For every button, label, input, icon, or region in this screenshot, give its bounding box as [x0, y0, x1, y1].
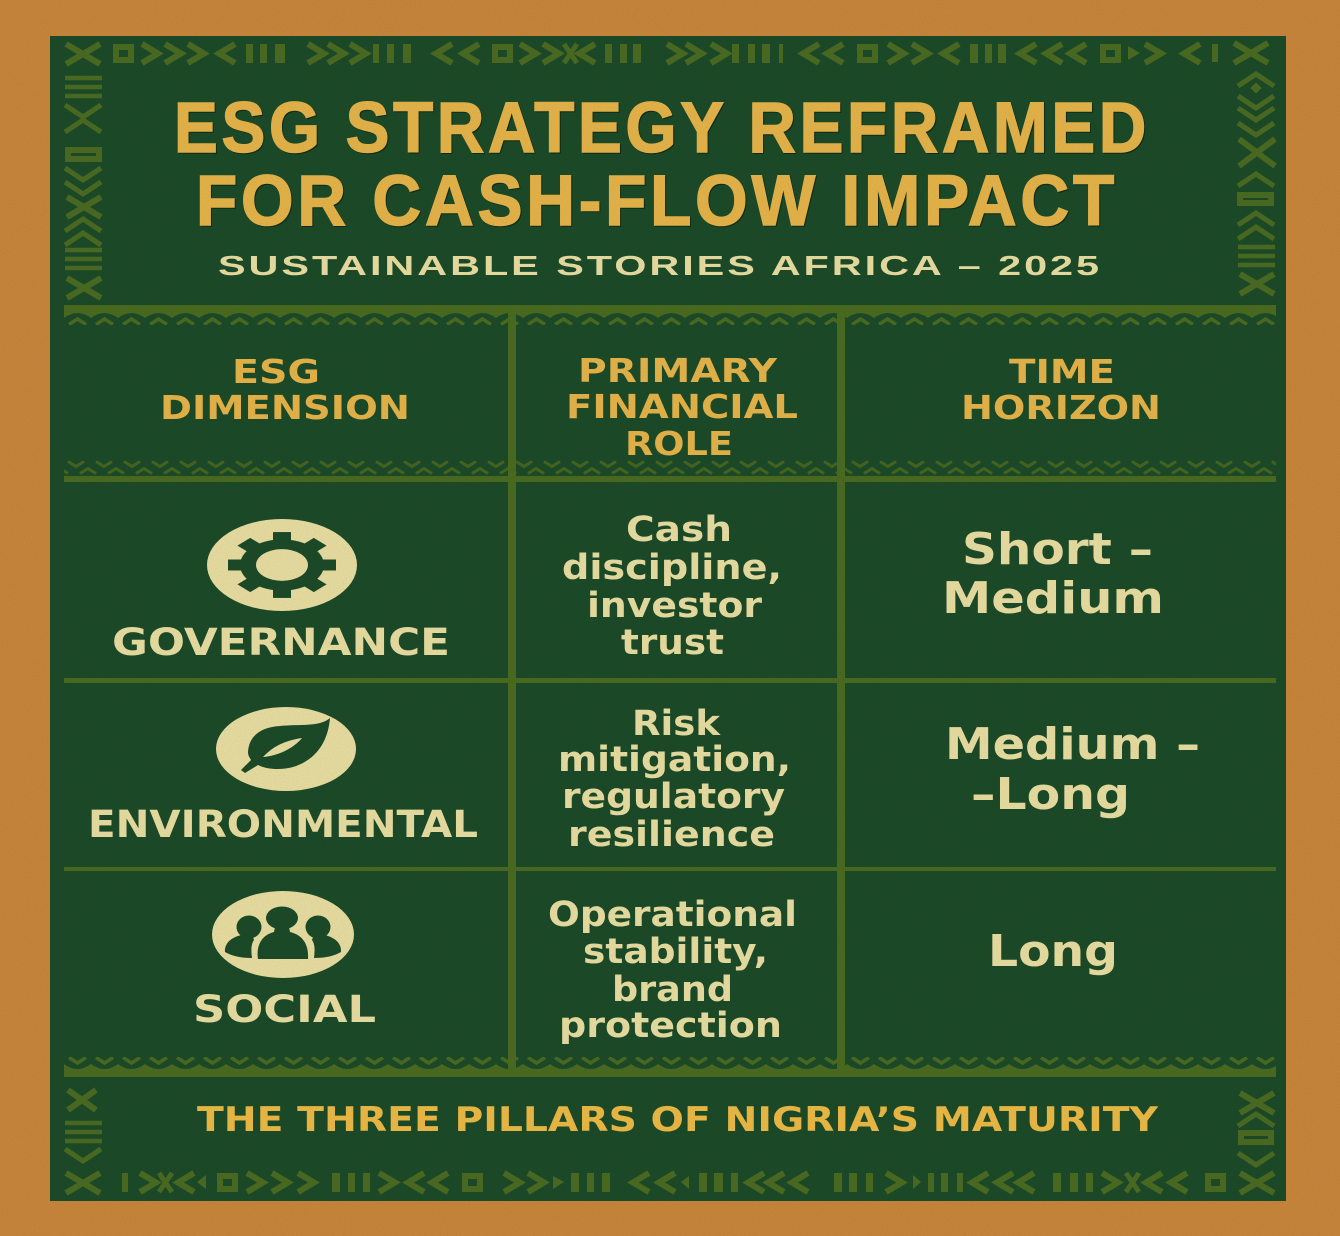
border: bottom pattern row: [66, 1173, 1274, 1193]
icon: gear: [207, 519, 357, 611]
column header: primary financial role: ROLE: [625, 424, 733, 463]
financial role: governance: [562, 510, 782, 663]
financial role: environmental: regulatory: [562, 777, 785, 817]
financial role: environmental: resilience: [568, 815, 775, 855]
row: social: [193, 891, 1118, 1046]
financial role: social: Operational: [548, 895, 797, 935]
time horizon: short to medium: [942, 524, 1164, 624]
title: FOR CASH-FLOW IMPACT: [196, 162, 1118, 241]
column header: ESG dimension: DIMENSION: [160, 388, 410, 427]
financial role: governance: Cash: [626, 510, 732, 550]
title: ESG STRATEGY REFRAMED: [174, 89, 1150, 168]
row: governance: [112, 510, 1164, 664]
financial role: governance: investor: [587, 586, 763, 626]
time horizon: short to medium: Short –: [962, 524, 1153, 575]
table grid: [64, 305, 1276, 1077]
subtitle: SUSTAINABLE STORIES AFRICA – 2025: [218, 250, 1102, 281]
border: right pattern column: [1238, 74, 1275, 294]
financial role: environmental: mitigation,: [558, 740, 791, 780]
border: top pattern row: [66, 43, 1268, 64]
border: left pattern column: [65, 78, 102, 298]
icon: leaf: [216, 707, 356, 791]
column header: ESG dimension: [160, 352, 410, 427]
time horizon: medium to long: –Long: [971, 769, 1130, 820]
column header: primary financial role: FINANCIAL: [566, 387, 798, 426]
label: environmental: ENVIRONMENTAL: [88, 803, 478, 846]
financial role: environmental: [558, 704, 791, 855]
time horizon: long: Long: [988, 926, 1118, 977]
financial role: environmental: Risk: [632, 704, 721, 744]
time horizon: medium to long: Medium –: [945, 719, 1200, 770]
border: bottom-left pattern column: [65, 1090, 102, 1161]
financial role: governance: discipline,: [562, 548, 782, 588]
column header: time horizon: TIME: [1009, 352, 1115, 391]
financial role: social: protection: [559, 1006, 782, 1046]
financial role: social: [548, 895, 797, 1046]
label: social: SOCIAL: [193, 988, 376, 1031]
financial role: social: brand: [612, 970, 733, 1010]
time horizon: short to medium: Medium: [942, 573, 1164, 624]
row: environmental: [88, 704, 1200, 855]
financial role: social: stability,: [583, 932, 768, 972]
column header: time horizon: [961, 352, 1161, 427]
icon: people: [212, 891, 354, 978]
footer caption: THE THREE PILLARS OF NIGRIA’S MATURITY: [197, 1100, 1158, 1140]
title: [174, 89, 1150, 241]
border: bottom-right pattern column: [1238, 1093, 1274, 1165]
label: governance: GOVERNANCE: [112, 621, 450, 664]
column header: primary financial role: [566, 351, 798, 463]
column header: ESG dimension: ESG: [232, 352, 320, 391]
column header: time horizon: HORIZON: [961, 388, 1161, 427]
column header: primary financial role: PRIMARY: [578, 351, 778, 390]
financial role: governance: trust: [621, 623, 724, 663]
time horizon: medium to long: [945, 719, 1200, 820]
